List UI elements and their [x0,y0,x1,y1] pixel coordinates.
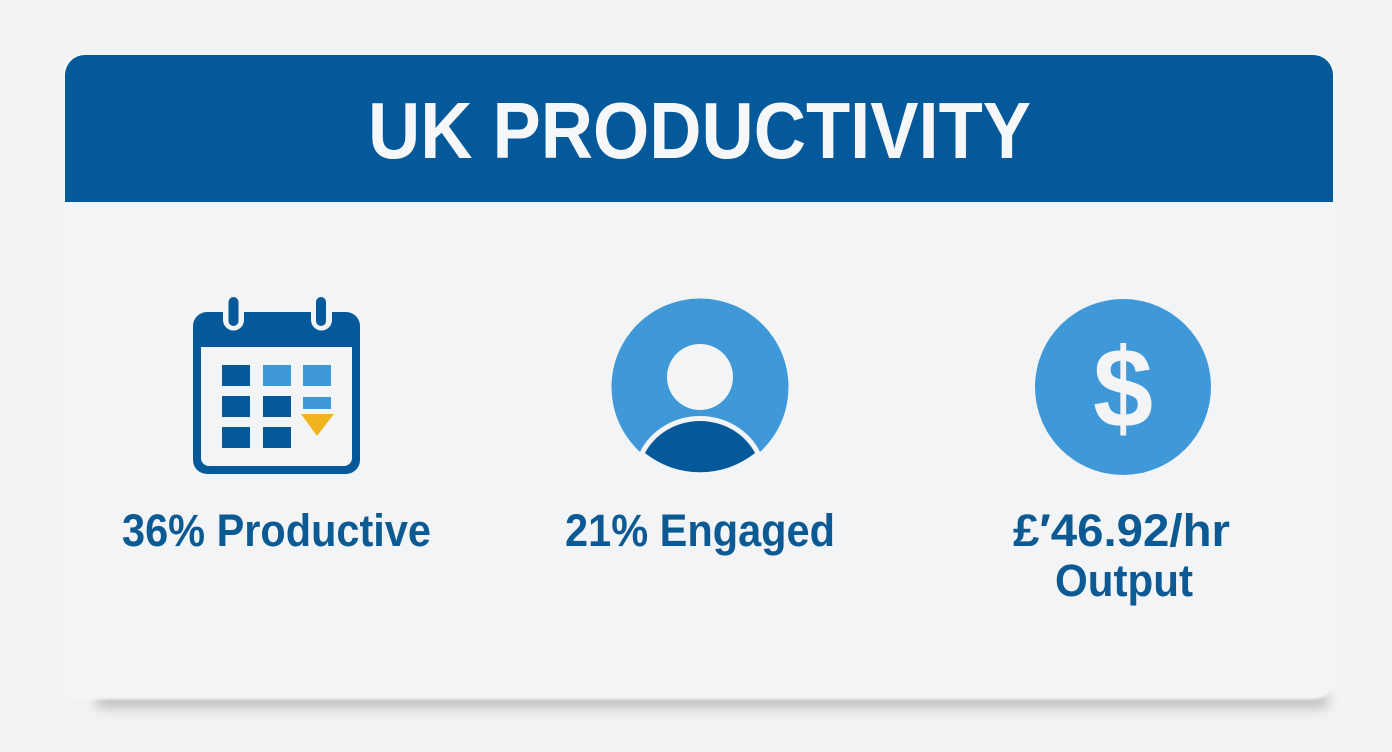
icon: dollar coin: $ [1093,325,1153,451]
panel: card [65,55,1333,698]
icon: person [612,298,788,476]
icon: calendar [193,297,360,474]
label: output per hour: £′46.92/hr [1013,505,1230,556]
title: UK PRODUCTIVITY [368,86,1031,175]
label: output per hour [1013,505,1230,606]
card edge glow [64,54,1334,699]
icon: dollar coin [1035,299,1211,475]
header band [65,55,1333,202]
label: 21% engaged: 21% Engaged [565,505,835,556]
label: 36% productive: 36% Productive [122,505,431,556]
card shadow [96,692,1328,708]
label: output per hour: Output [1055,555,1193,606]
